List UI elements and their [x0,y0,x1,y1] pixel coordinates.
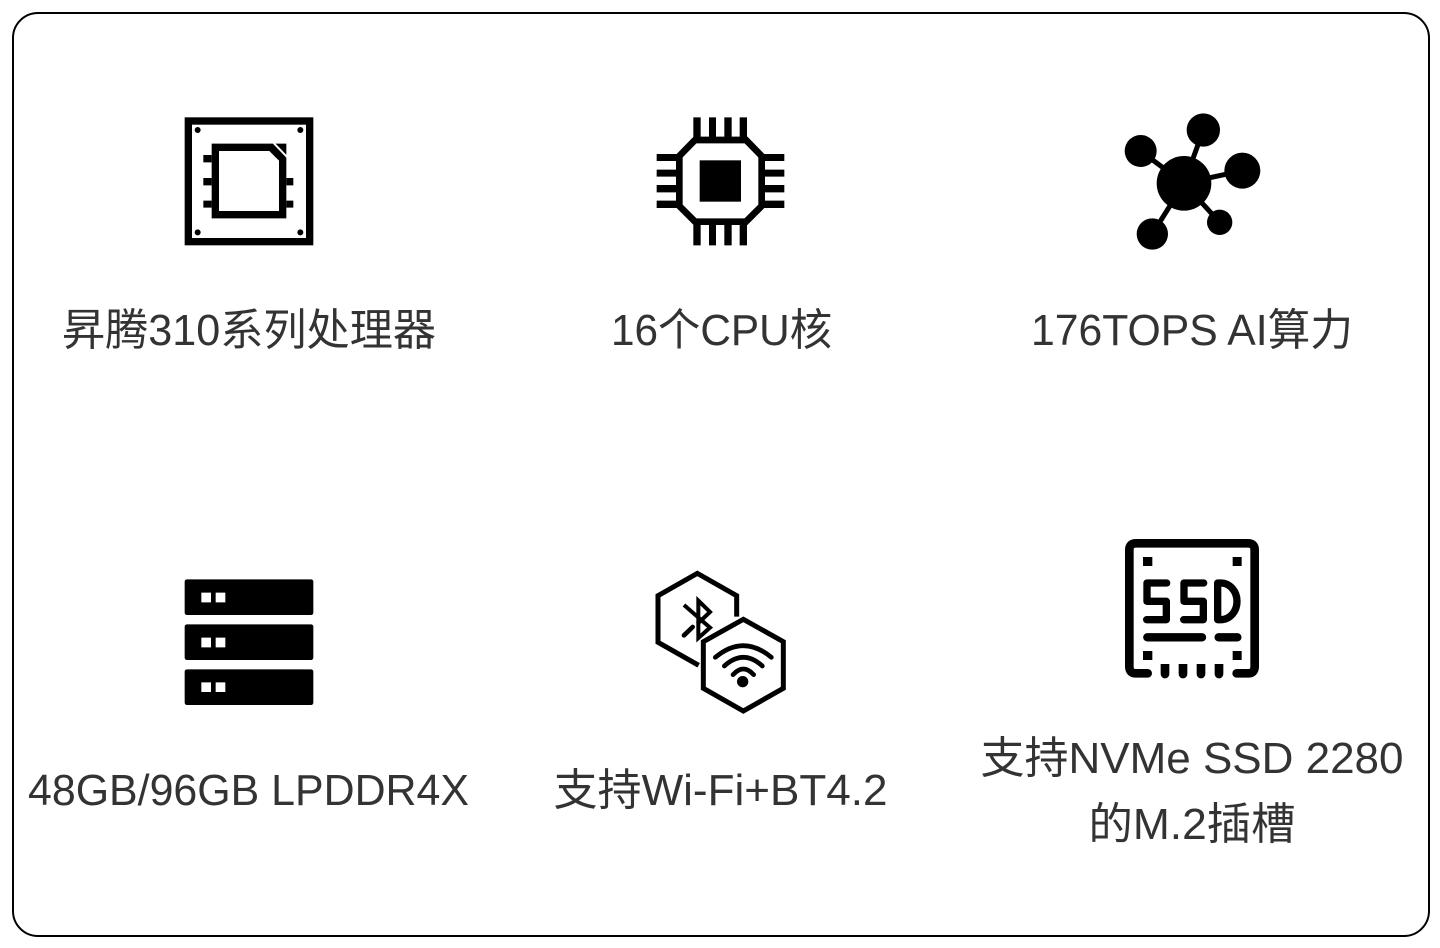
icon: processor board [188,121,310,242]
label: wireless: 支持Wi-Fi+BT4.2 [554,766,888,815]
icon: Bluetooth and Wi-Fi hexagons [658,573,783,711]
icon: AI network [1125,113,1260,250]
label: processor: 昇腾310系列处理器 [62,306,436,355]
label: storage: 的M.2插槽 [1088,800,1296,849]
label: AI compute: 176TOPS AI算力 [1031,306,1353,355]
icon: SSD [1129,543,1255,678]
label: storage [980,734,1404,849]
label: storage: 支持NVMe SSD 2280 [980,734,1404,783]
label: memory: 48GB/96GB LPDDR4X [28,766,469,815]
label: CPU cores: 16个CPU核 [611,306,832,355]
icon: memory stack [185,579,313,705]
icon: CPU chip [657,117,784,245]
